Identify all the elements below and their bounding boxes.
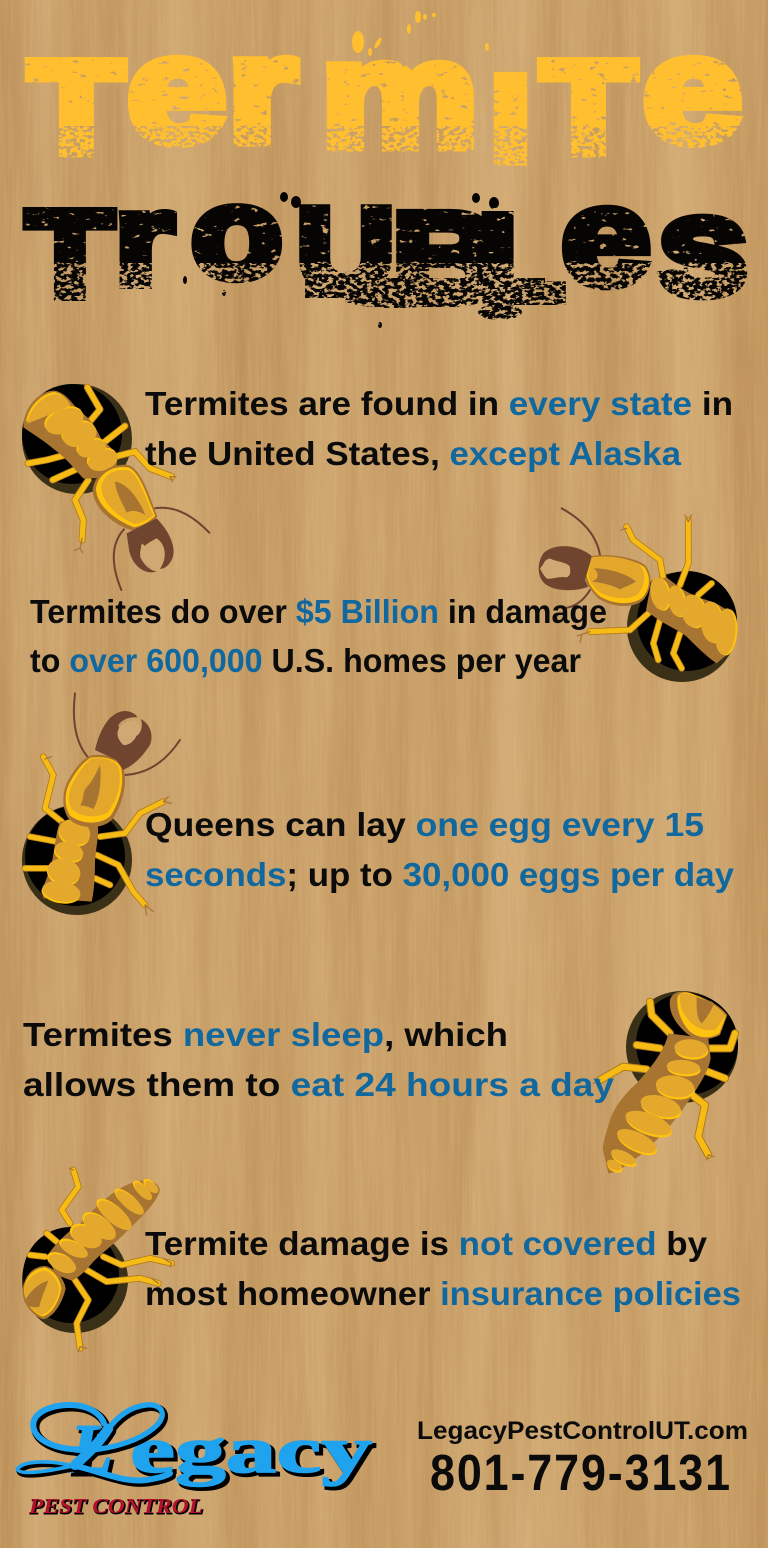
termite 4: [593, 991, 738, 1175]
title splatter, yellow: [352, 11, 489, 56]
fact 1 text: Termites are found in every state in: [145, 385, 733, 422]
title: Termite Troubles: [27, 5, 748, 330]
title line: Termite: [24, 11, 744, 166]
logo: Legacy Pest Control: [17, 1405, 375, 1519]
fact 4 text: allows them to eat 24 hours a day: [23, 1066, 615, 1103]
fact 5 text: Termite damage is not covered by: [145, 1225, 708, 1262]
logo subtitle shadow: PEST CONTROL: [29, 1495, 204, 1519]
termite 5: [22, 1168, 172, 1352]
logo subtitle: PEST CONTROL: [28, 1494, 203, 1518]
logo wordmark fill: egacy: [130, 1414, 372, 1487]
phone number: 801-779-3131: [430, 1445, 730, 1502]
title line: Termite: T: [542, 35, 635, 180]
title line: Troubles: s: [658, 168, 748, 324]
fact 3 text: [145, 806, 735, 893]
fact 3 text: seconds; up to 30,000 eggs per day: [145, 856, 735, 893]
title line: Termite: e: [127, 5, 226, 173]
fact 1 text: the United States, except Alaska: [145, 435, 682, 472]
fact 1 text: [145, 385, 733, 472]
hole 1: [22, 384, 132, 494]
hole 5: [22, 1227, 128, 1333]
title line: Troubles: o: [191, 162, 282, 305]
fact 5 text: most homeowner insurance policies: [145, 1275, 741, 1312]
termite 1: [22, 384, 209, 590]
title line: Troubles: U: [297, 184, 394, 314]
logo wordmark shadow: L: [72, 1414, 116, 1491]
termite 2: [539, 508, 739, 682]
title line: Troubles: B: [392, 187, 499, 330]
logo wordmark fill: L: [69, 1411, 113, 1488]
title line: Troubles: T: [27, 185, 113, 322]
title line: Troubles: [22, 192, 748, 328]
fact 5 text: [145, 1225, 741, 1312]
hole 2: [627, 572, 737, 682]
termite 3: [22, 693, 180, 915]
fact 4 text: [23, 1016, 615, 1103]
hole 3: [22, 805, 132, 915]
title line: Termite: I: [491, 51, 530, 186]
title line: Termite: e: [643, 5, 742, 173]
title line: Troubles: r: [115, 167, 174, 312]
logo swash: [17, 1405, 172, 1483]
fact 2 text: [30, 593, 607, 679]
fact 4 text: Termites never sleep , which: [23, 1016, 508, 1053]
title line: Troubles: e: [561, 159, 650, 314]
website: LegacyPestControlUT.com: [417, 1417, 748, 1445]
title line: Termite: m: [321, 10, 478, 178]
fact 2 text: Termites do over $5 Billion in damage: [30, 593, 607, 630]
logo wordmark shadow: egacy: [133, 1417, 375, 1490]
title line: Termite: T: [30, 35, 123, 180]
fact 3 text: Queens can lay one egg every 15: [145, 806, 704, 843]
title line: Termite: r: [228, 5, 297, 173]
title line: Troubles: L: [478, 189, 564, 326]
fact 2 text: to over 600,000 U.S. homes per year: [30, 642, 581, 679]
title splatter, black: [183, 192, 557, 328]
hole 4: [626, 991, 738, 1103]
